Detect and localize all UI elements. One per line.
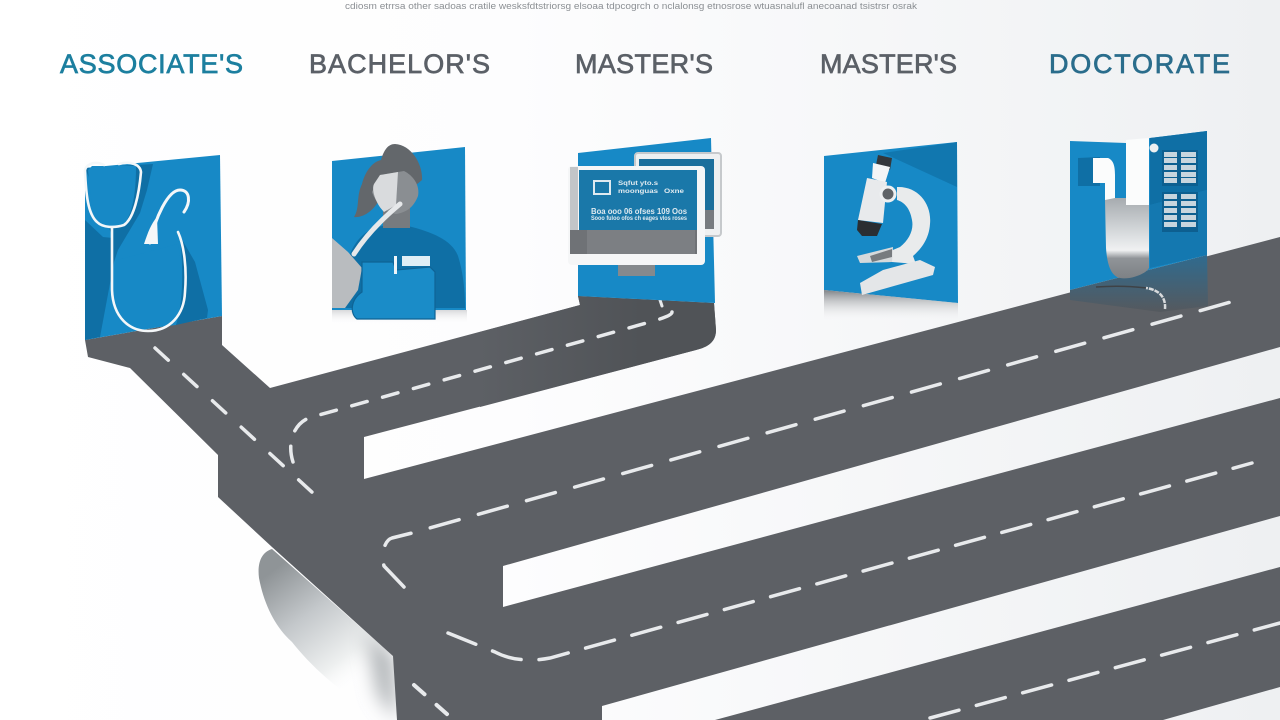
front monitor: [568, 166, 705, 265]
panel: microscope: [824, 142, 958, 322]
lane: main diagonal: [155, 348, 326, 505]
front monitor: Sooo fuloo ofos ch eages vlos roses: [591, 216, 688, 222]
lane: fourth road: [930, 623, 1280, 718]
panel: nurse with folder: [332, 144, 466, 319]
lane markings: [155, 298, 1280, 720]
front monitor: moonguas: [618, 189, 659, 195]
lane: lower diagonal: [414, 685, 456, 720]
lane: bachelor's road: [291, 312, 672, 462]
panel: nurse floor: [332, 310, 467, 324]
heading: master's second: MASTER'S: [820, 49, 957, 79]
heading: doctorate: DOCTORATE: [1049, 49, 1230, 79]
front monitor: Boa ooo 06 ofses 109 Oos: [591, 207, 688, 216]
icon: document grids: [1162, 150, 1198, 232]
road shadow: [259, 549, 397, 720]
road overlay on panel: [1070, 255, 1208, 312]
figure: nurse: [332, 144, 465, 308]
heading: associate's: ASSOCIATE'S: [60, 49, 243, 79]
panel: stethoscope: [85, 155, 222, 340]
lane: doctorate curve: [1096, 286, 1165, 309]
icon: white tower: [1093, 138, 1158, 278]
panel: doctorate: [1070, 131, 1208, 312]
lane: master's spur: [660, 300, 662, 306]
fine print line: cdiosm etrrsa other sadoas cratile wesksfdtstriorsg elsoaa tdpcogrch o nclalonsg etnosrose wtuasnalufl anecoanad tsistrsr osrak: [345, 1, 918, 11]
icon: microscope: [857, 155, 935, 295]
front monitor: Oxne: [664, 189, 685, 195]
icon: blue folder: [352, 256, 435, 319]
front monitor: Sqfut yto.s: [618, 181, 659, 187]
road section: bachelor's road shading: [480, 296, 716, 407]
back monitor: [635, 153, 721, 236]
icon: stethoscope: [85, 163, 189, 331]
panel: computer monitors: [568, 138, 721, 303]
lane: third road: [448, 463, 1252, 660]
road section: fourth road: [715, 567, 1280, 720]
heading: bachelor's: BACHELOR'S: [309, 49, 490, 79]
lane: second road: [383, 298, 1245, 587]
degree headings: [60, 49, 1230, 79]
monitor stand: [618, 264, 655, 276]
roadway network: [85, 237, 1280, 720]
heading: master's first: MASTER'S: [575, 49, 713, 79]
